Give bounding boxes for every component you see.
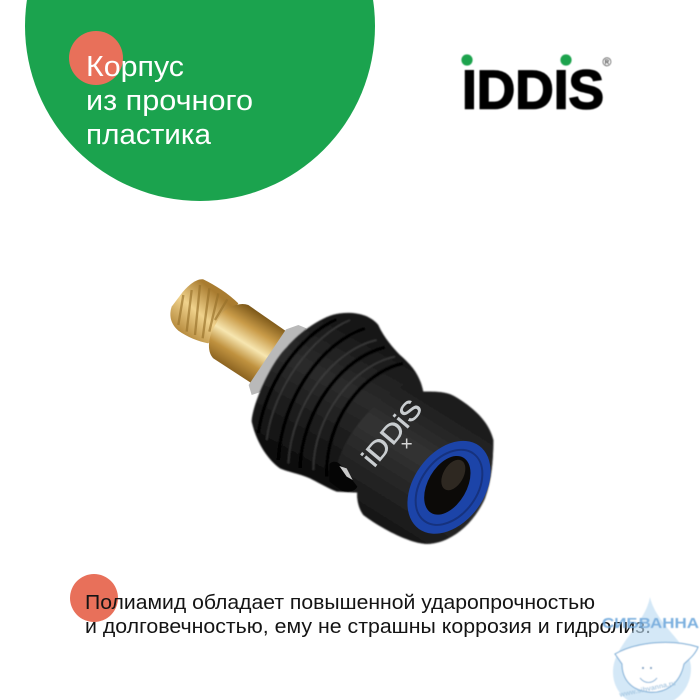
plus sign on body: + (401, 433, 413, 456)
icon: red accent circle bottom (70, 574, 118, 622)
brand mark on body: iDDiS (356, 394, 428, 472)
logo: IDDIS: IDDIS (462, 58, 604, 120)
text block: description: и долговечностью, ему не страшны коррозия и гидролиз. (85, 615, 651, 638)
heading: plastic body: Корпус (86, 51, 184, 83)
watermark: Sibvanna (602, 597, 699, 700)
watermark name: СИБВАННА (602, 615, 699, 632)
side slot (329, 462, 357, 492)
blue seal ring (390, 425, 508, 550)
heading: plastic body: пластика (86, 119, 211, 151)
heading: plastic body: из прочного (86, 85, 253, 117)
bathtub (615, 642, 698, 692)
watermark url: www.sibvanna.ru (618, 680, 676, 699)
splined brass tip (170, 279, 238, 343)
text block: description: Полиамид обладает повышенной ударопрочностью (85, 591, 595, 614)
water drop (613, 597, 691, 700)
product photo: cartridge (170, 279, 508, 550)
thread grooves (258, 319, 403, 477)
metal washer (249, 325, 307, 395)
icon: red accent circle top (69, 31, 123, 85)
brass shaft (209, 304, 287, 383)
black body (252, 313, 493, 544)
logo: IDDIS: ® (602, 55, 612, 69)
thread highlights (267, 320, 395, 470)
face (640, 678, 657, 682)
panel: green circle (25, 0, 375, 201)
barrel (337, 380, 493, 544)
